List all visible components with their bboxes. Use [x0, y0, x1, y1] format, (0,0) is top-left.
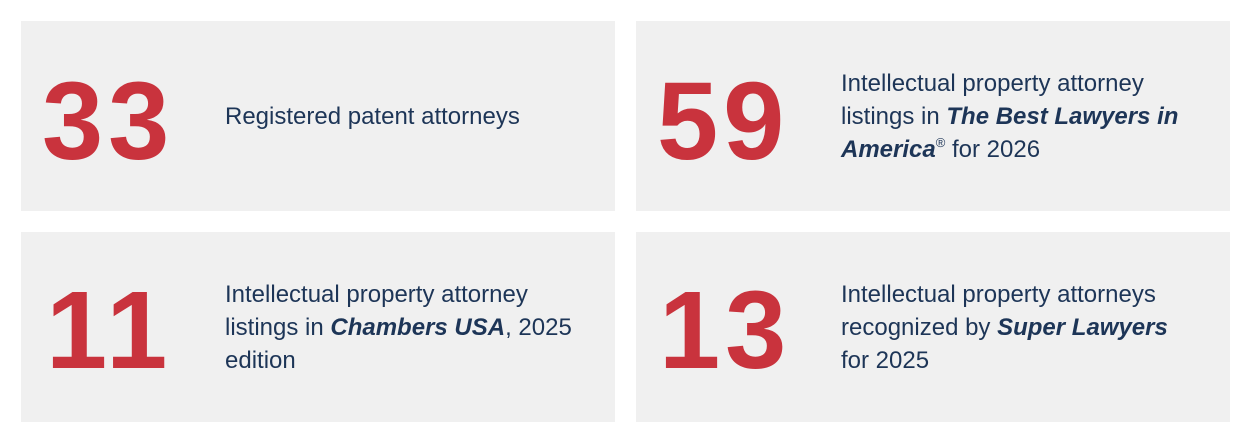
text: registered patent attorneys: Registered patent attorneys — [225, 103, 520, 130]
text: Best Lawyers: Intellectual property attorney listings in The Best Lawyers in America® for 2026 — [841, 70, 1178, 163]
number: 59: 59 — [657, 60, 789, 183]
text: Chambers USA: Intellectual property attorney listings in Chambers USA, 2025 edition — [225, 281, 572, 374]
number: 11: 11 — [46, 269, 172, 392]
panel: registered patent attorneys — [21, 21, 615, 211]
number: 33: 33 — [42, 60, 174, 183]
text: Super Lawyers: Intellectual property attorneys recognized by Super Lawyers for 2025 — [841, 281, 1168, 374]
number: 13: 13 — [659, 269, 791, 392]
panel: Super Lawyers — [636, 232, 1230, 422]
panel: Best Lawyers — [636, 21, 1230, 211]
panel: Chambers USA — [21, 232, 615, 422]
